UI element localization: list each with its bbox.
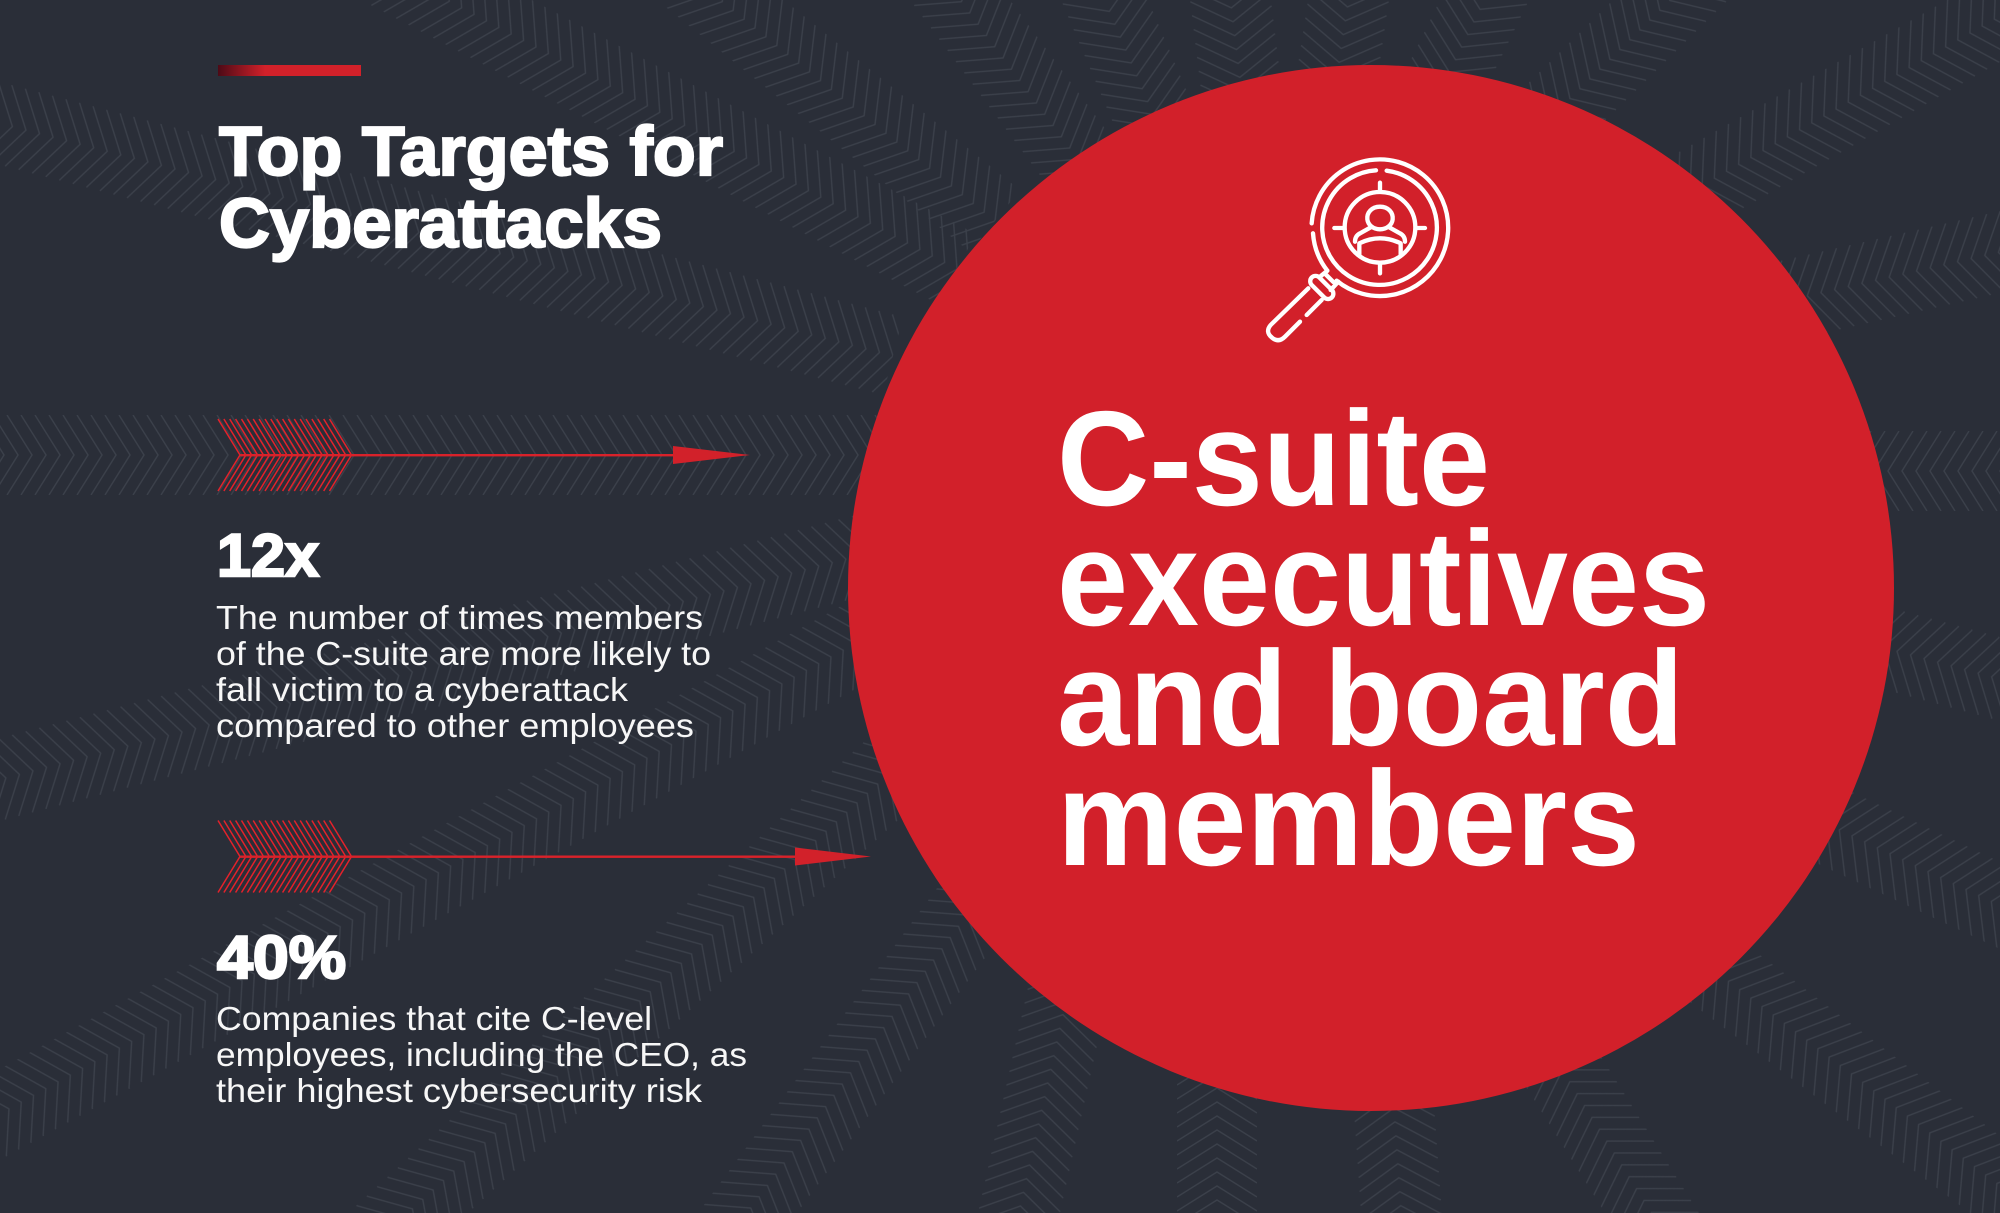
arrow: 40% [218, 820, 871, 892]
title [219, 112, 723, 262]
text block: 40% description: their highest cybersecurity risk [216, 1072, 703, 1109]
headline: C-suite [1057, 383, 1490, 534]
accent bar [218, 65, 361, 76]
text block: 12x description [216, 599, 711, 744]
text block: 40% description [216, 1000, 747, 1109]
headline [1057, 383, 1710, 894]
text block: 12x description: compared to other employees [216, 707, 694, 744]
stat: 12x: 12x [217, 522, 319, 589]
icon: magnifying glass over person target [1268, 159, 1448, 340]
headline: executives [1057, 503, 1710, 654]
title: Top Targets for [219, 112, 723, 190]
headline: members [1057, 743, 1640, 894]
arrow: 12x [218, 419, 750, 491]
title: Cyberattacks [219, 184, 662, 262]
stat: 40%: 40% [217, 924, 346, 991]
text block: 12x description: fall victim to a cyberattack [216, 671, 629, 708]
headline: and board [1057, 623, 1684, 774]
text block: 12x description: The number of times members [216, 599, 703, 636]
text block: 12x description: of the C-suite are more likely to [216, 635, 711, 672]
panel: red circle [848, 65, 1894, 1111]
text block: 40% description: employees, including the CEO, as [216, 1036, 747, 1073]
text block: 40% description: Companies that cite C-level [216, 1000, 652, 1037]
